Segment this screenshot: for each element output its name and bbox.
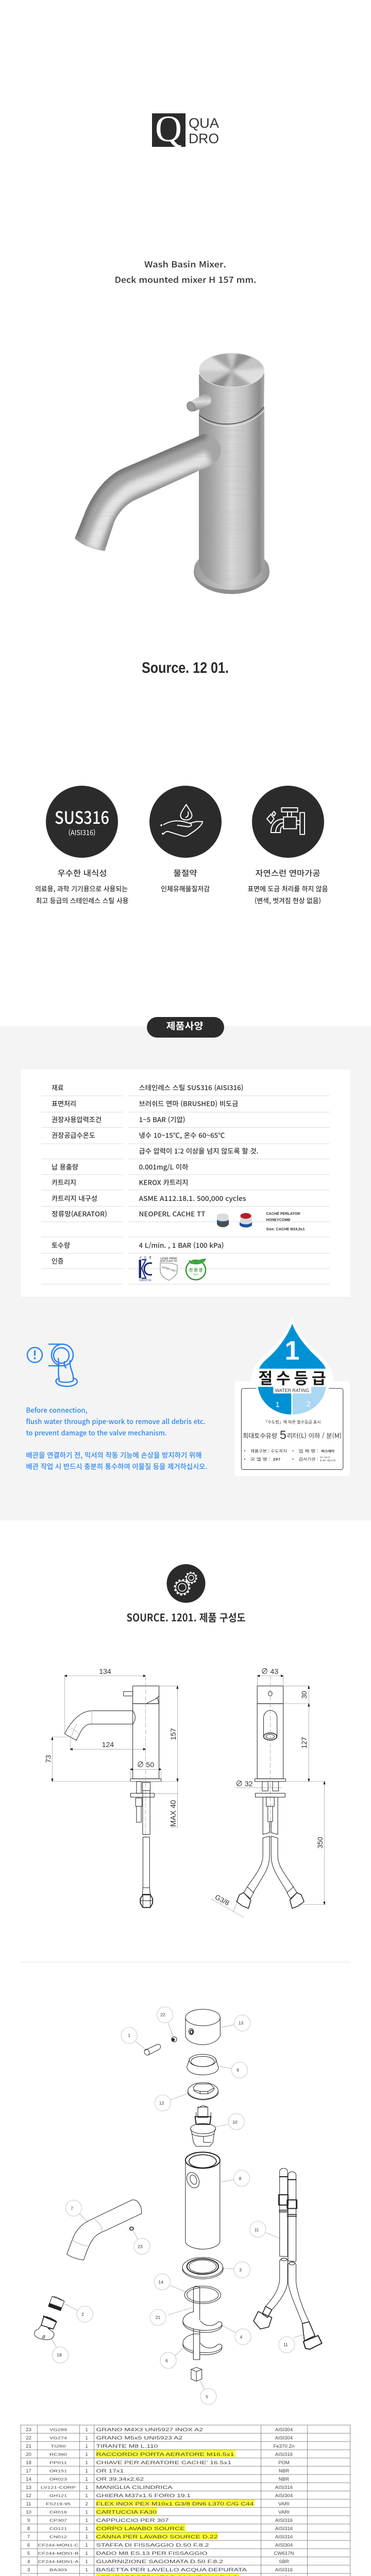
aerator photos [217,1213,252,1227]
panel: flushing warning [26,1344,207,1471]
part number bubbles: 23 [138,2244,143,2249]
parts row 11: FLEX INOX PEX M10x1 G3/8 DN6 L370 C/G C44 [96,2501,254,2507]
panel: specification section background [0,1026,371,1520]
icon: pipe flushing water [49,1344,77,1386]
warning text: 배관 작업 시 반드시 충분히 통수하여 이물질 등을 제거하십시오. [26,1461,207,1471]
body [199,407,264,586]
badge: water rating grade 1: 원 재료 시험연구원 [320,1459,335,1462]
spec row: material: 재료 [52,1082,64,1092]
parts row 22: VG274 [49,2436,67,2440]
parts row 13: MANIGLIA CILINDRICA [96,2485,173,2490]
parts row 22: AISI304 [275,2435,293,2441]
parts row 6: 1 [85,2543,88,2548]
parts row 14 [26,2477,289,2482]
feature: natural brushed finish: 표면에 도금 처리를 하지 않음 [247,884,328,893]
part number bubbles: 5 [206,2394,208,2399]
parts row 10: VARI [278,2510,290,2515]
parts row 10: 1 [85,2510,88,2515]
cap top [199,353,264,387]
icon: exclamation circle [27,1348,42,1362]
parts row 9 [27,2518,293,2523]
spec row: flow [52,1240,224,1250]
parts row 10: CARTUCCIA FA30 [96,2510,157,2515]
part number bubbles [52,2007,295,2404]
parts: cartridge, body, spout, ring, rod, hoses [35,2112,322,2389]
icon: lead free shield: LEAD FREE [161,1257,177,1260]
chart: dimension drawing, front view: 127 [300,1737,308,1749]
parts row 4: SBR [279,2559,289,2565]
parts row 22: 22 [26,2435,31,2441]
parts row 14: OR 39.34x2.62 [96,2477,144,2482]
spec row: surface: 표면처리 [52,1098,76,1108]
spec row: cartridge: KEROX 카트리지 [139,1177,189,1187]
spec row: flow: 토수량 [52,1240,70,1250]
spec row: pressure ratio: 급수 압력이 1:2 이상을 넘지 않도록 할 것. [139,1146,259,1156]
parts row 9: CP307 [49,2518,67,2522]
parts row 12: GH121 [49,2494,67,2498]
parts row 20: AISI316 [275,2452,293,2458]
parts row 11 [26,2501,290,2507]
flange [194,550,269,594]
parts row 11: VARI [278,2501,290,2507]
part number bubbles: 8 [239,2176,242,2181]
parts row 17: OR 17x1 [96,2468,124,2474]
parts row 5: CW617N [274,2551,294,2556]
spec row: aerator: 정류망(AERATOR) [52,1209,107,1218]
parts row 7: 1 [85,2534,88,2540]
logo: Quadro: DRO [189,131,219,146]
parts row 18: CHIAVE PER AERATORE CACHE' 16.5x1 [96,2460,231,2466]
parts row 5: CF244-MON1-B [38,2551,78,2555]
spec row: pressure [52,1114,185,1124]
spec row: surface: 브러쉬드 연마 (BRUSHED) 비도금 [139,1098,239,1108]
chart: dimension drawing, side view [44,1667,179,1907]
spec row: temperature [52,1130,225,1140]
parts row 8: 8 [27,2526,30,2532]
parts row 3: AISI316 [275,2567,293,2573]
parts row 23: VG289 [49,2428,67,2432]
spec row: aerator: NEOPERL CACHE TT [139,1209,206,1218]
parts row 13: 1 [85,2485,88,2490]
chart: dimension drawing, side view: MAX 40 [170,1800,178,1826]
badge: water rating grade 1: 1 [285,1336,299,1366]
parts row 6 [27,2543,293,2548]
part number bubbles: 3 [239,2267,242,2273]
logo: Quadro: Q [155,108,182,149]
parts row 6: CF244-MON1-C [38,2543,79,2547]
logo: Quadro [152,108,219,149]
parts row 13: LV121-CORP [41,2485,76,2489]
icon: lead free shield: NSF/ANSI 61 [160,1260,177,1262]
warning text: flush water through pipe-work to remove all debris etc. [26,1416,205,1426]
product subtitle [114,258,257,285]
icon: KC mark: 수 도 용 [139,1256,151,1260]
icon: eco mark [186,1259,206,1280]
parts row 18: POM [278,2460,290,2466]
warning text: to prevent damage to the valve mechanism. [26,1427,167,1437]
parts row 18: 18 [26,2460,31,2466]
part number bubbles: 4 [240,2334,243,2340]
parts row 7: AISI316 [275,2534,293,2540]
parts row 23: GRANO M4X3 UNI5927 INOX A2 [96,2427,203,2433]
parts row 3: 1 [85,2567,88,2573]
parts row 12: 12 [26,2493,31,2499]
parts row 11: 2 [85,2501,88,2507]
part number bubbles: 6 [165,2358,168,2363]
aerator caption: Size: CACHE M16,5x1 [266,1227,305,1231]
chart: dimension drawing, front view: 30 [300,1691,308,1699]
spec row: lead leaching [52,1162,189,1172]
part number bubbles: 13 [239,2021,243,2026]
part number bubbles: 22 [160,2012,165,2018]
spec row: cartridge [52,1177,189,1187]
icon: KC mark: 위생안전기준 [139,1279,151,1282]
feature: water saving: 물절약 [173,868,197,878]
parts: lever, cap, ring, nut [136,2009,234,2117]
badge: water rating grade 1: 바스데이 [322,1449,334,1453]
chart: dimension drawing, side view: 134 [99,1667,111,1675]
parts row 6: 6 [27,2543,30,2548]
parts row 22: GRANO M5x5 UNI5923 A2 [96,2435,182,2441]
panel: specification table [21,1070,350,1297]
parts row 18: PP011 [49,2461,67,2465]
logo: Quadro: QUA [189,115,219,131]
badge: water rating grade 1: 검사기관 : [299,1456,318,1462]
parts row 12: GHIERA M37x1.5 FORO 19.1 [96,2493,191,2499]
heading pill: product specs: 제품사양 [166,1019,203,1032]
part number bubbles: 12 [159,2100,164,2106]
parts row 23: 1 [85,2427,88,2433]
parts row 17: NBR [279,2468,289,2474]
badge: water rating grade 1: 최대토수유량 [243,1431,277,1440]
feature: corrosion resistance: 의료용, 과학 기기용으로 사용되는 [35,884,128,893]
parts row 22: 1 [85,2435,88,2441]
faucet product render [75,353,269,594]
icon: eco mark: 친환경 [189,1267,203,1273]
parts row 8: 1 [85,2526,88,2532]
feature: corrosion resistance [35,786,129,905]
icon: lead free shield [160,1257,177,1280]
parts row 13: AISI316 [275,2485,293,2490]
feature: corrosion resistance: 최고 등급의 스테인레스 스틸 사용 [36,895,129,905]
chart: dimension drawing, side view: ∅ 50 [137,1760,154,1769]
badge: SUS316 [46,786,118,858]
warning text [26,1404,207,1471]
badge: water rating grade 1: 리터(L) 이하 / 분(M) [287,1431,342,1440]
parts row 21: 1 [85,2444,88,2449]
parts row 8 [27,2526,293,2532]
parts row 7: CANNA PER LAVABO SOURCE D.22 [96,2534,217,2540]
spec row: temperature: 냉수 10~15℃, 온수 60~65℃ [139,1130,225,1140]
badge: water rating grade 1: 업 체 명 : [299,1448,318,1454]
parts row 12: 1 [85,2493,88,2499]
parts row 3: 3 [27,2567,30,2573]
icon: eco mark: 환경부 [193,1273,199,1276]
parts row 12 [26,2493,293,2499]
part number bubbles: 11 [255,2227,259,2232]
parts row 21: Fe370 Zn [273,2444,295,2449]
chart: dimension drawing, front view [211,1667,325,1917]
part number bubbles: 21 [156,2315,160,2320]
parts row 10 [26,2510,290,2515]
chart: exploded view of parts [35,2007,322,2404]
spec row: cartridge: 카트리지 [52,1177,76,1187]
parts row 14: 14 [26,2477,31,2482]
chart: dimension drawing, side view: 124 [102,1740,114,1749]
product subtitle: Deck mounted mixer H 157 mm. [114,273,257,285]
parts row 20: 1 [85,2452,88,2458]
parts row 14: OR023 [49,2477,67,2481]
parts row 14: NBR [279,2477,289,2482]
feature: corrosion resistance: 우수한 내식성 [58,868,107,878]
spec row: pressure: 권장사용압력조건 [52,1114,102,1124]
heading pill: product specs [147,1017,224,1038]
badge: water rating grade 1 [234,1317,350,1476]
parts row 7: 7 [27,2534,30,2540]
badge: water rating grade 1: 2 [306,1400,311,1409]
badge: water rating grade 1: 제품구분 : 수도꼭지 [250,1448,287,1454]
cap side [199,374,264,425]
parts row 4: 4 [27,2559,30,2565]
spec row: certification [52,1256,206,1282]
parts row 9: AISI316 [275,2518,293,2523]
parts row 5: 1 [85,2551,88,2556]
parts row 8: AISI316 [275,2526,293,2532]
warning text: Before connection, [26,1404,88,1415]
badge: water rating grade 1: 절수등급 [259,1366,326,1388]
parts row 23 [26,2427,293,2433]
parts row 4: GUARNIZIONE SAGOMATA D.50 F.8.2 [96,2559,223,2565]
part number bubbles: 9 [237,2067,239,2073]
spec row: pressure: 1~5 BAR (기압) [139,1114,185,1124]
parts row 10: 10 [26,2510,31,2515]
parts row 3 [27,2567,293,2573]
chart: dimension drawing, side view: 157 [169,1728,177,1740]
parts row 13 [26,2485,293,2490]
parts row 6: STAFFA DI FISSAGGIO D.50 F.8.2 [96,2543,209,2548]
chart: dimension drawing, front view: G3/8 [214,1893,231,1907]
parts row 20: RC360 [49,2452,67,2456]
parts row 20 [26,2452,293,2458]
part number bubbles: 11 [283,2342,288,2347]
parts row 13: 13 [26,2485,31,2490]
parts row 7 [27,2534,293,2540]
chart: dimension drawing, front view: ∅ 32 [235,1780,253,1788]
parts row 4 [27,2559,289,2565]
badge: SUS316: (AISI316) [68,827,96,837]
aerator caption [266,1211,305,1231]
icon: lead free shield: IAPMO R&T [161,1266,177,1273]
spec row: material [52,1082,243,1092]
feature: natural brushed finish: 자연스런 연마가공 [256,868,321,878]
badge: water rating grade 1: WATER RATING [275,1388,309,1393]
badge: SUS316: SUS316 [55,804,109,829]
parts row 17 [26,2468,289,2474]
parts row 5: 5 [27,2551,30,2556]
parts row 10: CR016 [49,2510,67,2514]
parts row 21: 21 [26,2444,31,2449]
parts row 21: TIRANTE M8 L.110 [96,2444,158,2449]
feature: natural brushed finish: (변색, 벗겨짐 현상 없음) [255,895,321,905]
spec row: aerator [52,1209,305,1231]
parts row 18 [26,2460,290,2466]
icon: KC mark [139,1256,152,1282]
badge: water rating grade 1: 1 [275,1400,280,1409]
part number bubbles: 1 [128,2033,130,2038]
parts row 17: 17 [26,2468,31,2474]
parts row 5 [27,2551,294,2556]
parts row 9: 1 [85,2518,88,2523]
parts row 3: BA303 [49,2568,67,2572]
badge: water rating grade 1: 한국 기계 연구 [320,1456,331,1459]
chart: dimension drawing, side view: 73 [44,1755,53,1763]
parts row 6: AISI304 [275,2543,293,2548]
feature: water saving: 인체유해물질저감 [161,884,210,893]
spec row: certification: 인증 [52,1256,64,1265]
parts row 17: OR151 [49,2469,67,2473]
spec row: lead leaching: 납 용출량 [52,1162,78,1172]
parts row 4: CF244-MON1-A [38,2560,78,2564]
parts row 17: 1 [85,2468,88,2474]
badge: water rating grade 1: 5 [280,1428,286,1442]
icon: tap with sparkle [267,808,305,835]
parts row 4: 1 [85,2559,88,2565]
parts row 20: 20 [26,2452,31,2458]
parts row 9: CAPPUCCIO PER 307 [96,2518,169,2523]
badge: water rating grade 1: 「수도법」에 따른 절수등급 표시 [264,1419,321,1425]
parts row 21 [26,2444,295,2449]
chart: dimension drawing, front view: 350 [316,1837,324,1849]
spec row: durability [52,1193,246,1203]
spec row: surface [52,1098,239,1108]
part number bubbles: 7 [71,2206,73,2211]
icon: hand with water drop [161,805,203,836]
spout [72,430,224,554]
part number bubbles: 2 [81,2312,84,2317]
spec row: material: 스테인레스 스틸 SUS316 (AISI316) [139,1082,243,1092]
parts row 14: 1 [85,2477,88,2482]
lever [188,394,211,411]
part number bubbles: 14 [158,2279,163,2284]
parts row 18: 1 [85,2460,88,2466]
parts row 11: FS219-95 [46,2502,71,2506]
icon: gears [167,1564,205,1603]
parts row 21: TI260 [50,2444,66,2448]
aerator caption: HONEYCOMB [266,1217,291,1222]
heading: product structure: SOURCE. 1201. 제품 구성도 [127,1609,245,1624]
parts row 3: BASETTA PER LAVELLO ACQUA DEPURATA [96,2567,247,2573]
spec row: flow: 4 L/min. , 1 BAR (100 kPa) [139,1240,224,1250]
parts row 12: AISI304 [275,2493,293,2499]
parts row 2 [27,2575,290,2576]
parts row 20: RACCORDO PORTA AERATORE M16.5x1 [96,2452,234,2458]
badge: water rating grade 1: 297 [273,1457,280,1462]
warning text: 배관을 연결하기 전, 믹서의 작동 기능에 손상을 방지하기 위해 [26,1450,202,1460]
parts row 7: CN012 [49,2535,67,2539]
parts row 5: DADO M8 ES.13 PER FISSAGGIO [96,2551,207,2556]
product name: Source. 12 01. [142,659,229,676]
spec row: durability: 카트리지 내구성 [52,1193,97,1203]
product subtitle: Wash Basin Mixer. [144,258,226,270]
feature: natural brushed finish [247,786,328,905]
parts row 8: CORPO LAVABO SOURCE [96,2526,184,2532]
spec row: temperature: 권장공급수온도 [52,1130,95,1140]
spec row: lead leaching: 0.001mg/L 이하 [139,1162,189,1172]
part number bubbles: 10 [232,2120,238,2125]
parts row 8: CO121 [49,2527,67,2531]
part number bubbles: 18 [57,2352,62,2358]
chart: dimension drawing, front view: ∅ 43 [261,1667,278,1675]
feature: water saving [149,786,222,893]
badge: water rating grade 1: 모 델 명 : [250,1456,270,1462]
aerator caption: CACHÉ PERLATOR [266,1211,300,1216]
parts row 9: 9 [27,2518,30,2523]
parts row 11: 11 [26,2501,31,2507]
parts row 22 [26,2435,293,2441]
parts row 23: AISI304 [275,2427,293,2433]
spec row: durability: ASME A112.18.1. 500,000 cycles [139,1193,246,1203]
parts row 23: 23 [26,2427,31,2433]
table: parts list [21,2425,350,2576]
